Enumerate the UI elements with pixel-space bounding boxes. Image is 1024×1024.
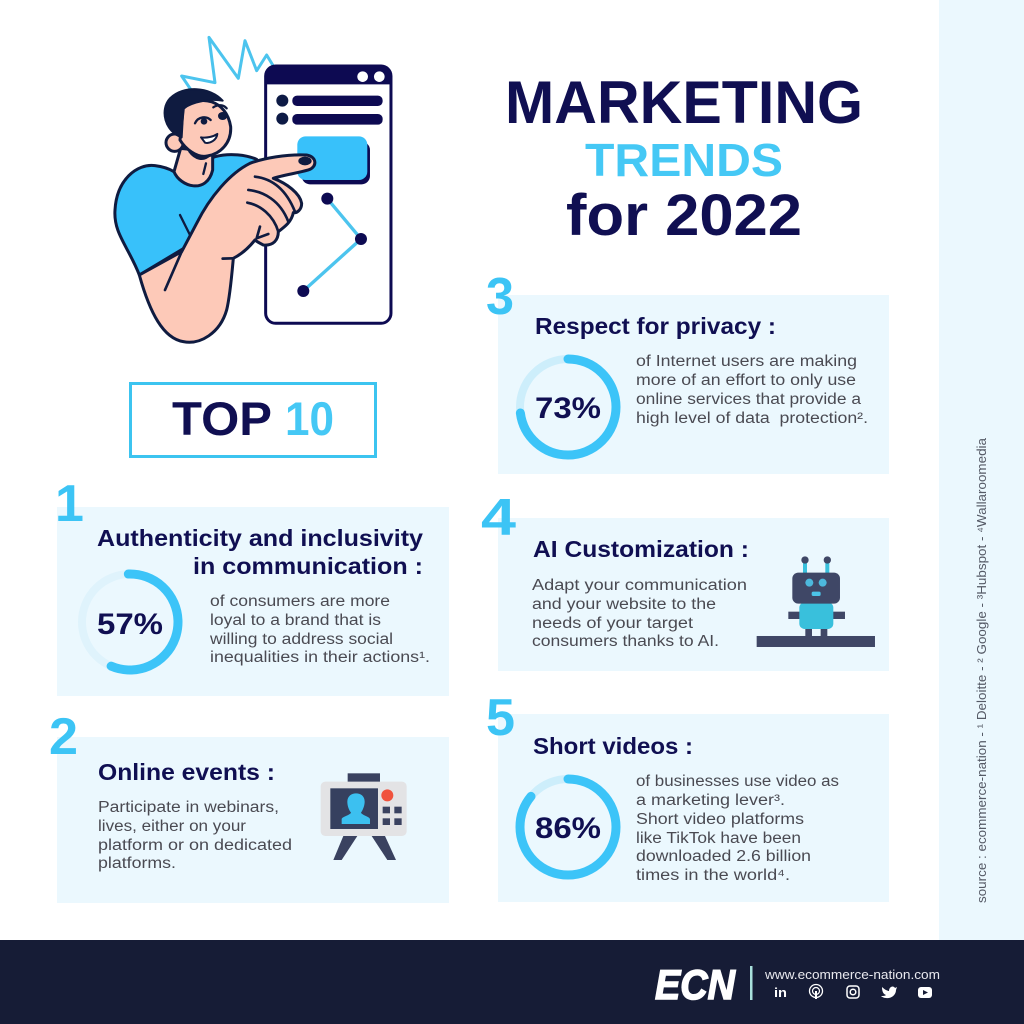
panel: trend 5: [486, 689, 889, 902]
number 4: 4: [481, 489, 516, 547]
text block: Participate in webinars,: [98, 799, 279, 816]
text block: of consumers are more: [210, 593, 390, 610]
panel: trend 1: [55, 475, 449, 696]
phone screen: [266, 66, 391, 323]
donut: 73%: [520, 359, 616, 455]
footer: [0, 940, 1024, 1024]
donut: 86%: [520, 779, 616, 875]
text block: a marketing lever³.: [636, 792, 785, 809]
icon: video camera on tripod: [321, 773, 407, 860]
text block: more of an effort to only use: [636, 372, 856, 389]
illustration: person pointing at phone: [115, 37, 391, 342]
panel: trend 2: [49, 708, 449, 903]
source note: source : ecommerce-nation - ¹ Deloitte - ² Google - ³Hubspot - ⁴Wallaroomedia: [975, 438, 989, 903]
number 1: 1: [55, 475, 84, 533]
icon: twitter: [881, 987, 897, 998]
icon: robot: [757, 556, 875, 647]
top 10 badge: 10: [285, 392, 334, 445]
title: TRENDS: [585, 134, 783, 186]
heading: ai customization: AI Customization :: [533, 536, 749, 562]
text block: and your website to the: [532, 596, 716, 613]
text block: inequalities in their actions¹.: [210, 649, 430, 666]
person: head: [165, 89, 231, 235]
heading: online events: Online events :: [98, 759, 275, 785]
divider: [750, 966, 752, 1000]
person: shirt: [115, 155, 257, 275]
text block: needs of your target: [532, 615, 694, 632]
heading: short videos: Short videos :: [533, 733, 693, 759]
text block: platform or on dedicated: [98, 837, 292, 854]
title: [505, 69, 863, 248]
person: neck: [174, 148, 213, 186]
text block: [209, 593, 430, 666]
icon: podcast: [810, 984, 822, 999]
text block: times in the world⁴.: [636, 867, 790, 884]
text block: willing to address social: [209, 631, 393, 648]
text block: [636, 773, 839, 884]
icon: linkedin: in: [774, 985, 787, 1000]
text block: of Internet users are making: [636, 353, 857, 370]
text block: platforms.: [98, 855, 176, 872]
panel: trend 3: [486, 268, 889, 474]
icon: instagram: [847, 986, 859, 998]
number 2: 2: [49, 708, 78, 766]
text block: lives, either on your: [98, 818, 246, 835]
heading: authenticity and inclusivity: Authenticity and inclusivity: [97, 525, 423, 551]
text block: like TikTok have been: [636, 830, 801, 847]
heading: authenticity and inclusivity: [97, 525, 423, 579]
text block: Adapt your communication: [532, 577, 747, 594]
text block: loyal to a brand that is: [210, 612, 381, 629]
donut: 57%: [80, 572, 180, 672]
title: MARKETING: [505, 69, 863, 136]
text block: [98, 799, 292, 872]
text block: of businesses use video as: [636, 773, 839, 790]
text block: [532, 577, 747, 650]
top 10 badge: [130, 384, 376, 456]
text block: high level of data protection².: [636, 410, 868, 427]
number 3: 3: [486, 268, 514, 326]
number 5: 5: [486, 689, 515, 747]
heading: authenticity and inclusivity: in communication :: [193, 553, 423, 579]
icon: youtube: [918, 987, 932, 998]
text block: [636, 353, 868, 427]
donut: 86%: 86%: [535, 812, 601, 845]
logo: ECN: ECN: [655, 961, 736, 1008]
website address: www.ecommerce-nation.com: [764, 968, 940, 982]
text block: online services that provide a: [636, 391, 861, 408]
title: for 2022: [566, 183, 802, 248]
side strip: [939, 0, 1024, 940]
panel: trend 4: [481, 489, 889, 671]
icon: spark lines: [182, 37, 273, 89]
text block: downloaded 2.6 billion: [636, 848, 811, 865]
text block: consumers thanks to AI.: [532, 633, 719, 650]
text block: Short video platforms: [636, 811, 804, 828]
top 10 badge: TOP: [172, 392, 272, 445]
donut: 73%: 73%: [535, 392, 601, 425]
donut: 57%: 57%: [97, 608, 163, 641]
heading: respect for privacy: Respect for privacy :: [535, 313, 776, 339]
person: arm and pointing hand: [139, 155, 315, 342]
